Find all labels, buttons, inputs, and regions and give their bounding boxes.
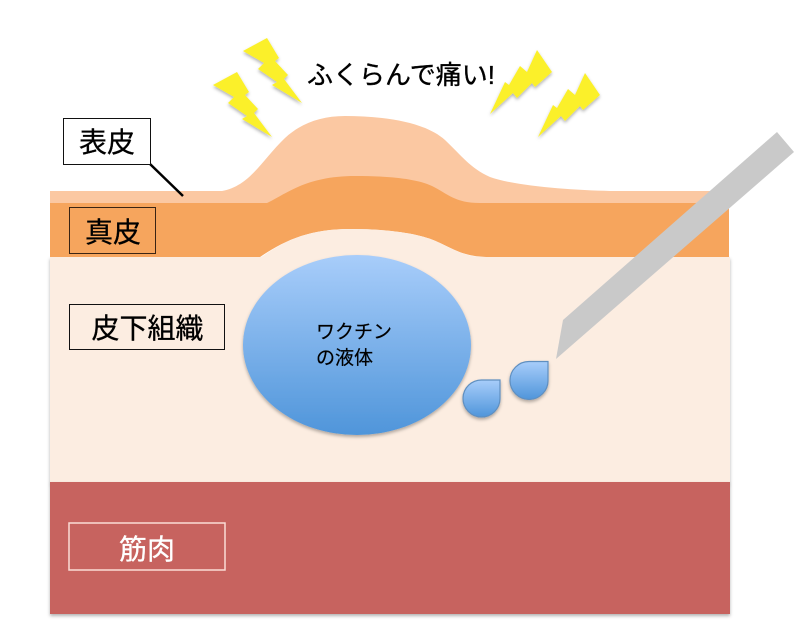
layer: dermis <box>50 176 729 257</box>
vaccine fluid label: の液体 <box>316 347 373 369</box>
label: subcutaneous tissue <box>70 304 224 350</box>
label: dermis: 真皮 <box>85 217 141 248</box>
layer: subcutaneous tissue <box>50 257 730 483</box>
icon: lightning bolt lower right <box>538 73 600 137</box>
label: dermis <box>70 208 156 254</box>
icon: lightning bolt upper right <box>490 50 552 114</box>
icon: lightning bolt lower left <box>213 72 272 137</box>
label: epidermis <box>64 118 150 164</box>
icon: lightning bolt upper left <box>243 38 302 103</box>
label: subcutaneous tissue: 皮下組織 <box>91 313 204 344</box>
icon: droplet right <box>510 362 548 399</box>
label: muscle <box>69 523 225 570</box>
heading: swelling pain: ふくらんで痛い! <box>307 60 495 90</box>
icon: droplet left <box>463 380 500 417</box>
leader line for epidermis <box>150 164 183 196</box>
needle <box>556 132 794 359</box>
layer: epidermis <box>50 116 729 204</box>
label: epidermis: 表皮 <box>79 127 135 158</box>
layer: muscle <box>50 482 730 614</box>
bump of subcutaneous tissue <box>260 229 490 258</box>
vaccine fluid ellipse <box>243 255 471 435</box>
label: muscle: 筋肉 <box>119 534 175 565</box>
vaccine fluid label: ワクチン <box>316 321 392 343</box>
